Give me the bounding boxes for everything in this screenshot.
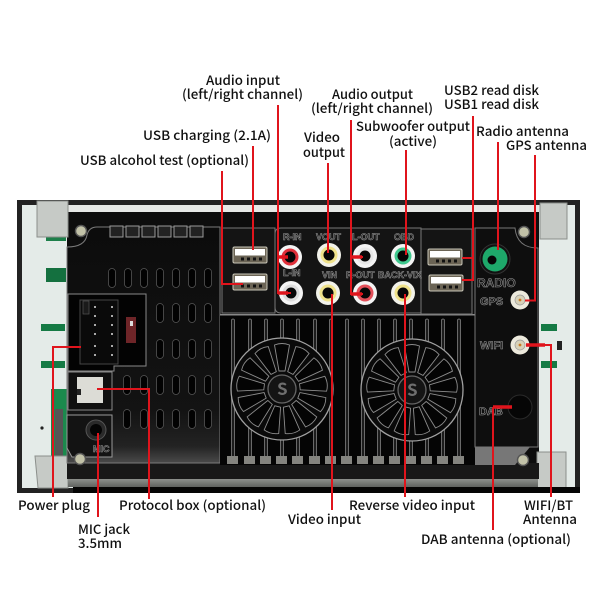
line: USB read disk [462, 116, 473, 280]
label: WIFI/BT antenna: WIFI/BT [524, 495, 573, 514]
DAB antenna socket [508, 395, 532, 419]
protocol box connector [68, 372, 112, 410]
label: video output: output [303, 142, 345, 161]
heatsink fins [220, 314, 476, 465]
line: MIC jack [97, 433, 99, 517]
line: reverse video input [404, 294, 406, 497]
port silkscreen labels: BACK-VIX [378, 270, 422, 280]
MIC jack panel: MIC [93, 444, 110, 454]
left fan: S [277, 375, 288, 400]
GPS antenna socket [510, 290, 530, 310]
label: subwoofer output: (active) [389, 131, 437, 150]
port panels [222, 228, 472, 314]
line: audio output [351, 120, 363, 294]
corner brackets [35, 201, 567, 488]
label: DAB antenna: DAB antenna (optional) [421, 529, 571, 548]
label: USB alcohol test: USB alcohol test (optional) [80, 150, 249, 169]
label: protocol box: Protocol box (optional) [119, 495, 266, 514]
top notches [110, 226, 203, 237]
label: USB read disk: USB1 read disk [444, 94, 540, 113]
line: WIFI/BT antenna [526, 345, 551, 497]
line: video input [331, 294, 333, 510]
label: USB read disk: USB2 read disk [444, 80, 540, 99]
port silkscreen labels: GPS [480, 296, 503, 308]
right side board details [541, 324, 562, 368]
label: MIC jack: MIC jack [78, 519, 131, 538]
outer metal frame [17, 200, 580, 493]
port silkscreen labels: DAB [479, 406, 503, 418]
line: radio antenna [497, 142, 499, 250]
port silkscreen labels: VOUT [316, 232, 342, 242]
port silkscreen labels: VIN [322, 270, 337, 280]
left fan [231, 338, 333, 440]
label: audio output: Audio output [332, 84, 413, 103]
RCA jacks [278, 243, 415, 305]
line: power plug [53, 347, 81, 497]
power connector block [68, 294, 146, 371]
radio unit photo [17, 200, 580, 493]
label: audio input: Audio input [206, 70, 280, 89]
MIC jack panel [67, 415, 112, 457]
bottom bands [67, 463, 539, 479]
line: video output [327, 163, 329, 253]
right fan: S [407, 376, 418, 401]
label: WIFI/BT antenna: Antenna [523, 509, 577, 528]
label: USB charging: USB charging (2.1A) [143, 125, 271, 144]
vent slots [108, 268, 212, 428]
label: power plug: Power plug [18, 495, 90, 514]
label: video output: Video [303, 127, 340, 146]
label: radio antenna: Radio antenna [476, 121, 569, 140]
line: audio input [278, 105, 291, 293]
port silkscreen labels: R-IN [283, 232, 302, 242]
right antenna panel [475, 228, 538, 465]
line: protocol box [97, 389, 149, 499]
port silkscreen labels [283, 232, 516, 418]
red callout lines [53, 105, 551, 530]
line: GPS antenna [525, 155, 535, 300]
label: MIC jack: 3.5mm [78, 533, 122, 552]
screws [74, 226, 530, 466]
label: audio input: (left/right channel) [182, 84, 303, 103]
port silkscreen labels: L-IN [283, 268, 300, 278]
port silkscreen labels: RADIO [477, 276, 516, 290]
port silkscreen labels: WIFI [480, 340, 503, 352]
thick red connector stubs [278, 257, 545, 407]
port silkscreen labels: OBD [394, 232, 414, 242]
port silkscreen labels: L-OUT [352, 232, 380, 242]
label: video input: Video input [287, 509, 361, 528]
left side board details [40, 237, 67, 456]
line: USB alcohol test [222, 171, 243, 284]
line: subwoofer output [405, 150, 407, 255]
left chassis panel [67, 227, 220, 463]
fuse [126, 317, 136, 343]
label: GPS antenna: GPS antenna [506, 135, 587, 154]
right fan [361, 339, 463, 441]
label: subwoofer output: Subwoofer output [356, 116, 470, 135]
USB ports [233, 247, 463, 291]
port silkscreen labels: R-OUT [346, 270, 375, 280]
radio antenna socket [480, 244, 510, 274]
label: audio output: (left/right channel) [311, 98, 433, 117]
labels [18, 70, 587, 552]
line: DAB antenna [492, 407, 494, 530]
top metal strip [68, 205, 538, 212]
line: USB charging [252, 146, 254, 250]
label: reverse video input: Reverse video input [349, 495, 475, 514]
WIFI antenna socket [510, 336, 530, 354]
